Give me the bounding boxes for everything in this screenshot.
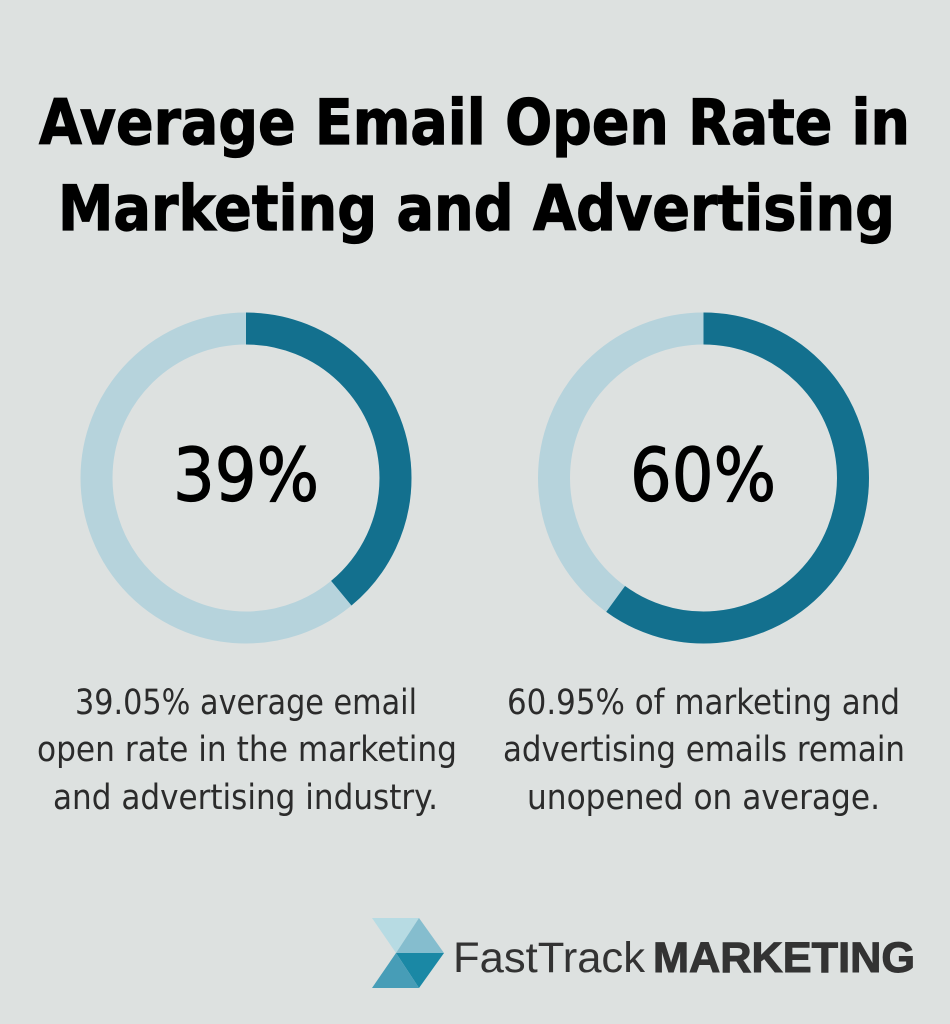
logo: FastTrack Marketing xyxy=(372,918,915,988)
text block: unopened description: unopened on average. xyxy=(527,778,880,818)
donut chart: 39%: 39% xyxy=(173,434,319,518)
logo wordmark: FastTrack xyxy=(453,934,645,982)
text block: open rate description: and advertising industry. xyxy=(53,778,438,818)
logo wordmark xyxy=(453,934,915,982)
text block: unopened description xyxy=(503,683,905,818)
donut chart: 39% xyxy=(96,328,396,628)
text block: open rate description: open rate in the marketing xyxy=(37,730,457,770)
donut chart: 60%: 60% xyxy=(630,434,776,518)
text block: unopened description: 60.95% of marketing and xyxy=(507,683,900,723)
icon: logo triangles xyxy=(372,918,444,988)
text block: open rate description xyxy=(37,683,457,818)
text block: unopened description: advertising emails remain xyxy=(503,730,905,770)
text block: open rate description: 39.05% average email xyxy=(75,683,417,723)
logo wordmark: MARKETING xyxy=(653,934,915,982)
donut chart: 60% xyxy=(554,328,853,628)
title xyxy=(39,86,910,245)
